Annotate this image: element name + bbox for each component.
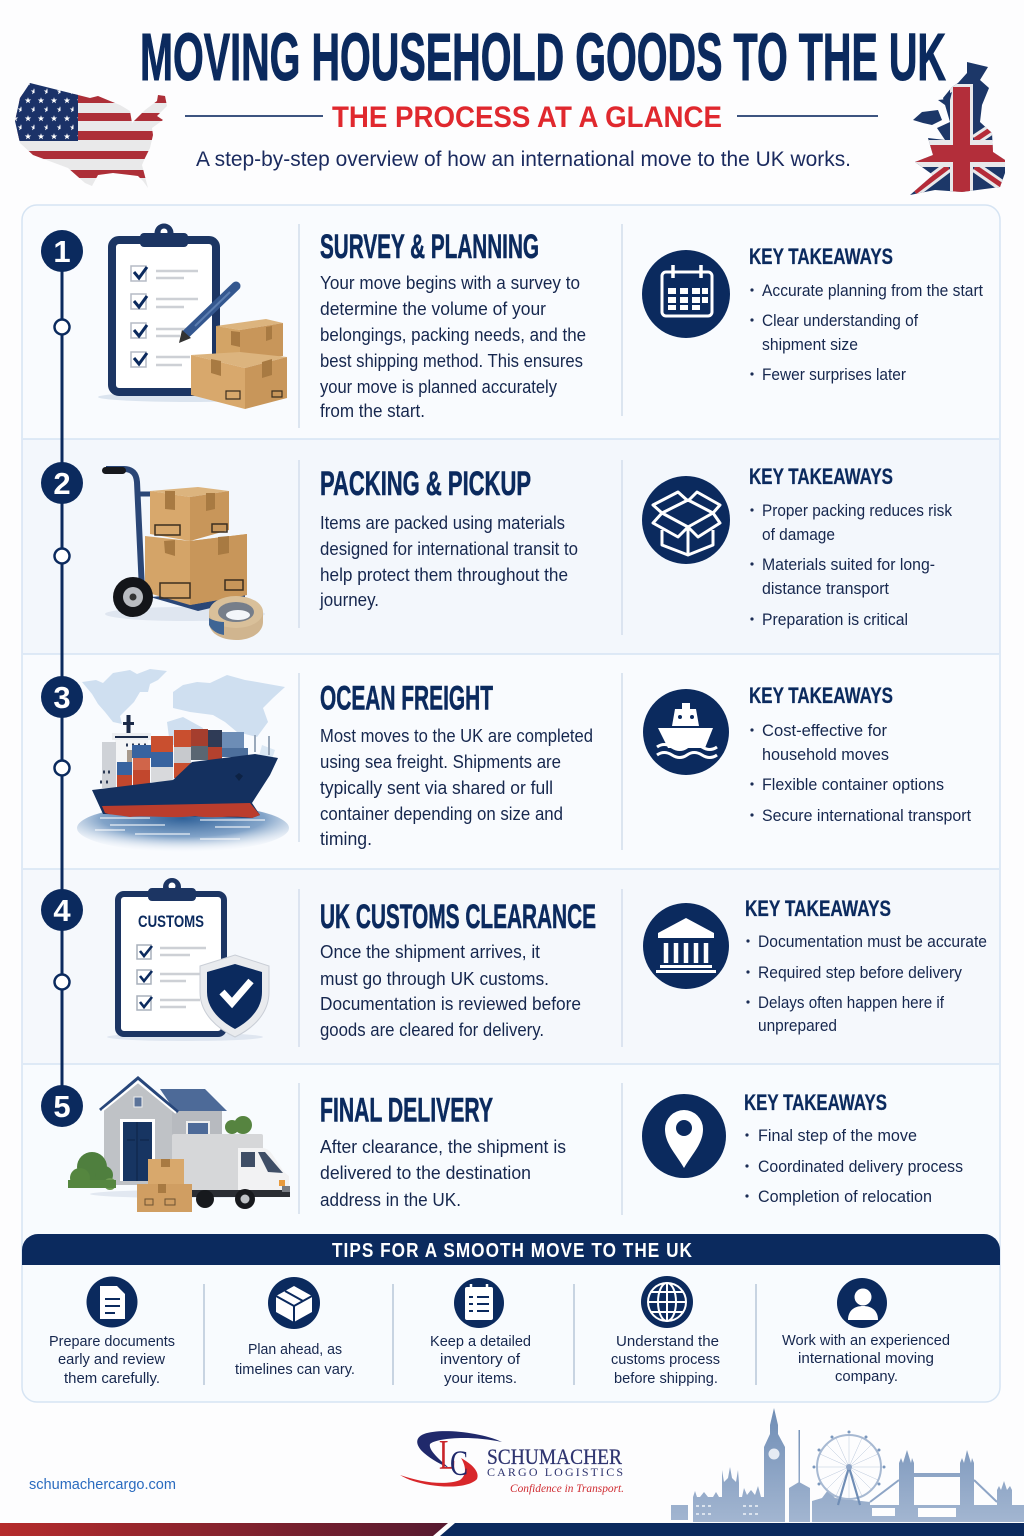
takeaways heading: KEY TAKEAWAYS xyxy=(744,1090,887,1115)
description: container depending on size and xyxy=(320,804,563,824)
takeaways list: Clear understanding of xyxy=(762,312,918,330)
tip: moving company: Work with an experienced xyxy=(782,1332,950,1349)
website url: schumachercargo.com xyxy=(29,1477,176,1493)
tip: customs process: Understand the xyxy=(616,1333,719,1350)
tip: plan ahead: Plan ahead, as xyxy=(248,1341,342,1358)
tip: inventory: your items. xyxy=(444,1370,517,1387)
takeaways list: Final step of the move xyxy=(758,1127,917,1145)
illustration: house and delivery truck xyxy=(68,1078,290,1212)
description: Items are packed using materials xyxy=(320,513,565,533)
takeaways list xyxy=(750,722,971,825)
description: must go through UK customs. xyxy=(320,969,549,989)
description: delivered to the destination xyxy=(320,1163,531,1183)
icon: location pin xyxy=(642,1094,726,1178)
tip: customs process xyxy=(611,1276,720,1387)
tip: customs process: before shipping. xyxy=(614,1370,718,1387)
takeaways list: Accurate planning from the start xyxy=(762,282,983,300)
icon: ship xyxy=(643,689,729,775)
tip: plan ahead xyxy=(235,1277,355,1378)
tip: plan ahead: timelines can vary. xyxy=(235,1361,355,1378)
logo: SCHUMACHER xyxy=(487,1444,622,1469)
description: Your move begins with a survey to xyxy=(320,273,580,293)
step number 5: 5 xyxy=(53,1089,71,1124)
tip: customs process: customs process xyxy=(611,1351,720,1368)
step 4 takeaways xyxy=(643,896,987,1035)
step 1 text xyxy=(320,228,586,421)
description xyxy=(319,513,578,610)
step 5 text xyxy=(320,1092,566,1210)
illustration: customs clipboard and shield xyxy=(107,878,269,1041)
description xyxy=(320,942,581,1040)
takeaways heading: KEY TAKEAWAYS xyxy=(749,683,893,708)
tips header bar xyxy=(22,1234,1000,1265)
icon: UK flag map xyxy=(910,62,1005,195)
tip: documents: them carefully. xyxy=(64,1370,160,1387)
takeaways list: Required step before delivery xyxy=(758,964,963,982)
takeaways heading: KEY TAKEAWAYS xyxy=(749,464,893,489)
takeaways list: Documentation must be accurate xyxy=(758,933,987,951)
step 2 text xyxy=(319,465,578,610)
logo: C xyxy=(450,1443,468,1483)
tips header bar: TIPS FOR A SMOOTH MOVE TO THE UK xyxy=(332,1240,693,1262)
tip: documents xyxy=(49,1276,175,1387)
takeaways list: Cost-effective for xyxy=(762,722,887,740)
panel: tips xyxy=(22,1234,1000,1387)
takeaways list xyxy=(745,1127,963,1206)
description xyxy=(320,1137,566,1210)
logo xyxy=(400,1431,624,1495)
takeaways list: distance transport xyxy=(762,580,889,598)
description: best shipping method. This ensures xyxy=(320,351,583,371)
tip: documents: Prepare documents xyxy=(49,1333,175,1350)
takeaways list: Proper packing reduces risk xyxy=(762,502,953,520)
description xyxy=(320,726,593,849)
description: address in the UK. xyxy=(320,1190,461,1210)
header xyxy=(15,32,1005,195)
description xyxy=(320,273,586,421)
description: Most moves to the UK are completed xyxy=(320,726,593,746)
step number 2 xyxy=(41,462,83,504)
tip: inventory: Keep a detailed xyxy=(430,1333,531,1350)
takeaways list: Materials suited for long- xyxy=(762,556,935,574)
description: using sea freight. Shipments are xyxy=(320,752,561,772)
tip: moving company: international moving xyxy=(798,1350,934,1367)
step number 4 xyxy=(41,889,83,931)
takeaways list: Flexible container options xyxy=(762,776,944,794)
description: Documentation is reviewed before xyxy=(320,994,581,1014)
logo: Confidence in Transport. xyxy=(510,1481,624,1495)
icon: USA flag map xyxy=(15,83,167,188)
takeaways heading: KEY TAKEAWAYS xyxy=(745,896,891,921)
takeaways list: Fewer surprises later xyxy=(762,366,906,384)
takeaways list: of damage xyxy=(762,526,835,544)
description: designed for international transit to xyxy=(320,539,578,559)
takeaways list: Completion of relocation xyxy=(758,1188,932,1206)
description: journey. xyxy=(319,590,379,610)
heading: PACKING & PICKUP xyxy=(320,465,531,503)
step number 4: 4 xyxy=(53,893,71,928)
takeaways list: Coordinated delivery process xyxy=(758,1158,963,1176)
takeaways list xyxy=(750,282,983,384)
description: determine the volume of your xyxy=(320,299,546,319)
step number 2: 2 xyxy=(53,466,71,501)
description: belongings, packing needs, and the xyxy=(320,325,586,345)
icon: open box xyxy=(642,476,730,564)
logo: L xyxy=(439,1433,456,1479)
step 3 takeaways xyxy=(643,683,971,825)
step number 3 xyxy=(41,676,83,718)
step 4 text xyxy=(320,898,596,1040)
step number 1: 1 xyxy=(53,234,71,269)
takeaways list xyxy=(746,933,987,1035)
takeaways list: household moves xyxy=(762,746,889,764)
takeaways list: Secure international transport xyxy=(762,807,971,825)
description: your move is planned accurately xyxy=(320,377,557,397)
illustration: clipboard and boxes xyxy=(98,224,287,409)
takeaways list xyxy=(750,502,953,629)
illustration: hand truck and boxes xyxy=(102,467,265,640)
clipboard label: CUSTOMS xyxy=(138,912,204,931)
description: from the start. xyxy=(320,401,425,421)
heading: OCEAN FREIGHT xyxy=(320,680,493,718)
takeaways list: Preparation is critical xyxy=(762,611,908,629)
tagline: A step-by-step overview of how an international move to the UK works. xyxy=(196,148,851,171)
heading: SURVEY & PLANNING xyxy=(320,228,539,266)
london skyline xyxy=(671,1408,1024,1522)
description: After clearance, the shipment is xyxy=(320,1137,566,1157)
tip: documents: early and review xyxy=(58,1351,165,1368)
description: timing. xyxy=(320,829,372,849)
step number 1 xyxy=(41,230,83,272)
step 1 takeaways xyxy=(642,244,983,384)
subtitle: THE PROCESS AT A GLANCE xyxy=(332,101,722,134)
step number 5 xyxy=(41,1085,83,1127)
step 5 takeaways xyxy=(642,1090,963,1206)
tip: inventory: inventory of xyxy=(440,1351,521,1368)
footer bar xyxy=(0,1523,1024,1536)
panel: process card xyxy=(22,205,1000,1402)
logo: CARGO LOGISTICS xyxy=(487,1465,623,1479)
icon: government building xyxy=(643,903,729,989)
icon: calendar xyxy=(642,250,730,338)
tip: moving company xyxy=(782,1278,950,1385)
description: goods are cleared for delivery. xyxy=(320,1020,544,1040)
step 3 text xyxy=(320,680,593,849)
heading: FINAL DELIVERY xyxy=(320,1092,493,1130)
takeaways heading: KEY TAKEAWAYS xyxy=(749,244,893,269)
step 2 takeaways xyxy=(642,464,953,629)
heading: UK CUSTOMS CLEARANCE xyxy=(320,898,596,936)
takeaways list: Delays often happen here if xyxy=(758,994,944,1012)
description: typically sent via shared or full xyxy=(320,778,553,798)
step number 3: 3 xyxy=(53,680,71,715)
description: Once the shipment arrives, it xyxy=(320,942,540,962)
description: help protect them throughout the xyxy=(320,565,568,585)
timeline xyxy=(41,230,83,1127)
takeaways list: unprepared xyxy=(758,1017,837,1035)
tip: moving company: company. xyxy=(835,1368,898,1385)
takeaways list: shipment size xyxy=(762,336,858,354)
tip: inventory xyxy=(430,1278,531,1387)
illustration: container ship and world map xyxy=(77,669,289,852)
